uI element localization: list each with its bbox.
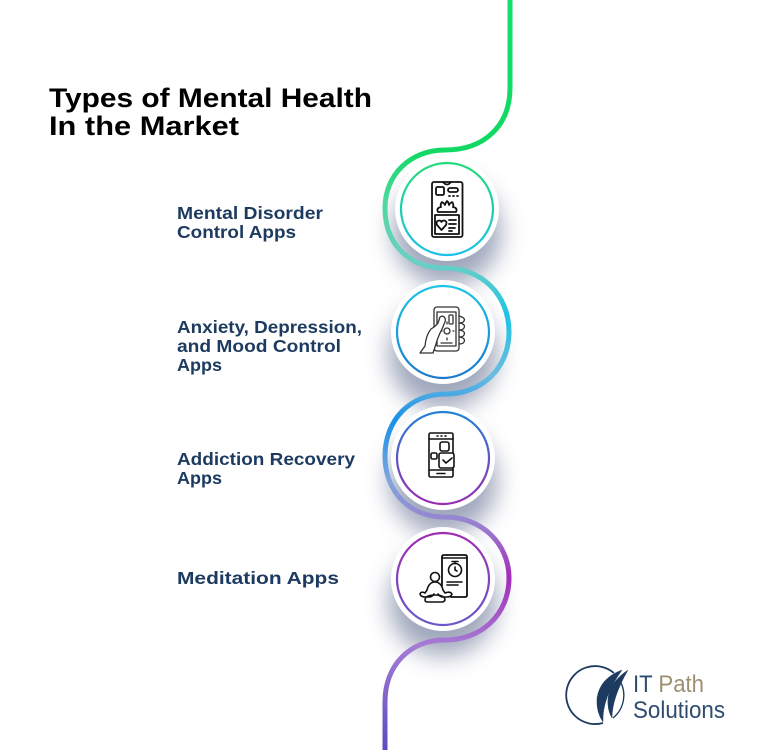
label: Anxiety, Depression, and Mood Control Apps: Anxiety, Depression, [177,317,362,337]
logo mark [566,666,628,724]
label: Meditation Apps: Meditation Apps [177,568,339,588]
icon: meditating person with timer phone [420,555,467,602]
circle badge 4 [391,527,495,631]
logo text [633,671,725,724]
logo text: Solutions [633,697,725,724]
circle badge 3 [391,406,495,510]
label: Mental Disorder Control Apps [177,203,323,242]
icon: phone with lotus and heart [432,182,462,237]
label: Anxiety, Depression, and Mood Control Apps [177,317,362,375]
title: Types of Mental Health [49,83,372,113]
icon: hand holding phone [420,307,464,353]
label: Anxiety, Depression, and Mood Control Apps: Apps [177,355,222,375]
circle badge 1 [395,157,499,261]
gradient wave line [385,0,510,750]
label: Addiction Recovery Apps: Addiction Recovery [177,449,355,469]
label: Mental Disorder Control Apps: Control Apps [177,222,296,242]
title: In the Market [49,111,239,141]
circle shadows [389,178,501,656]
label: Addiction Recovery Apps [177,449,355,488]
label: Addiction Recovery Apps: Apps [177,468,222,488]
logo text: IT Path [633,671,704,698]
label: Anxiety, Depression, and Mood Control Apps: and Mood Control [177,336,341,356]
icon: phone with checkmark [429,433,454,477]
logo: IT Path Solutions [566,666,725,724]
label: Mental Disorder Control Apps: Mental Disorder [177,203,323,223]
title [49,83,372,141]
circle badge 2 [391,280,495,384]
